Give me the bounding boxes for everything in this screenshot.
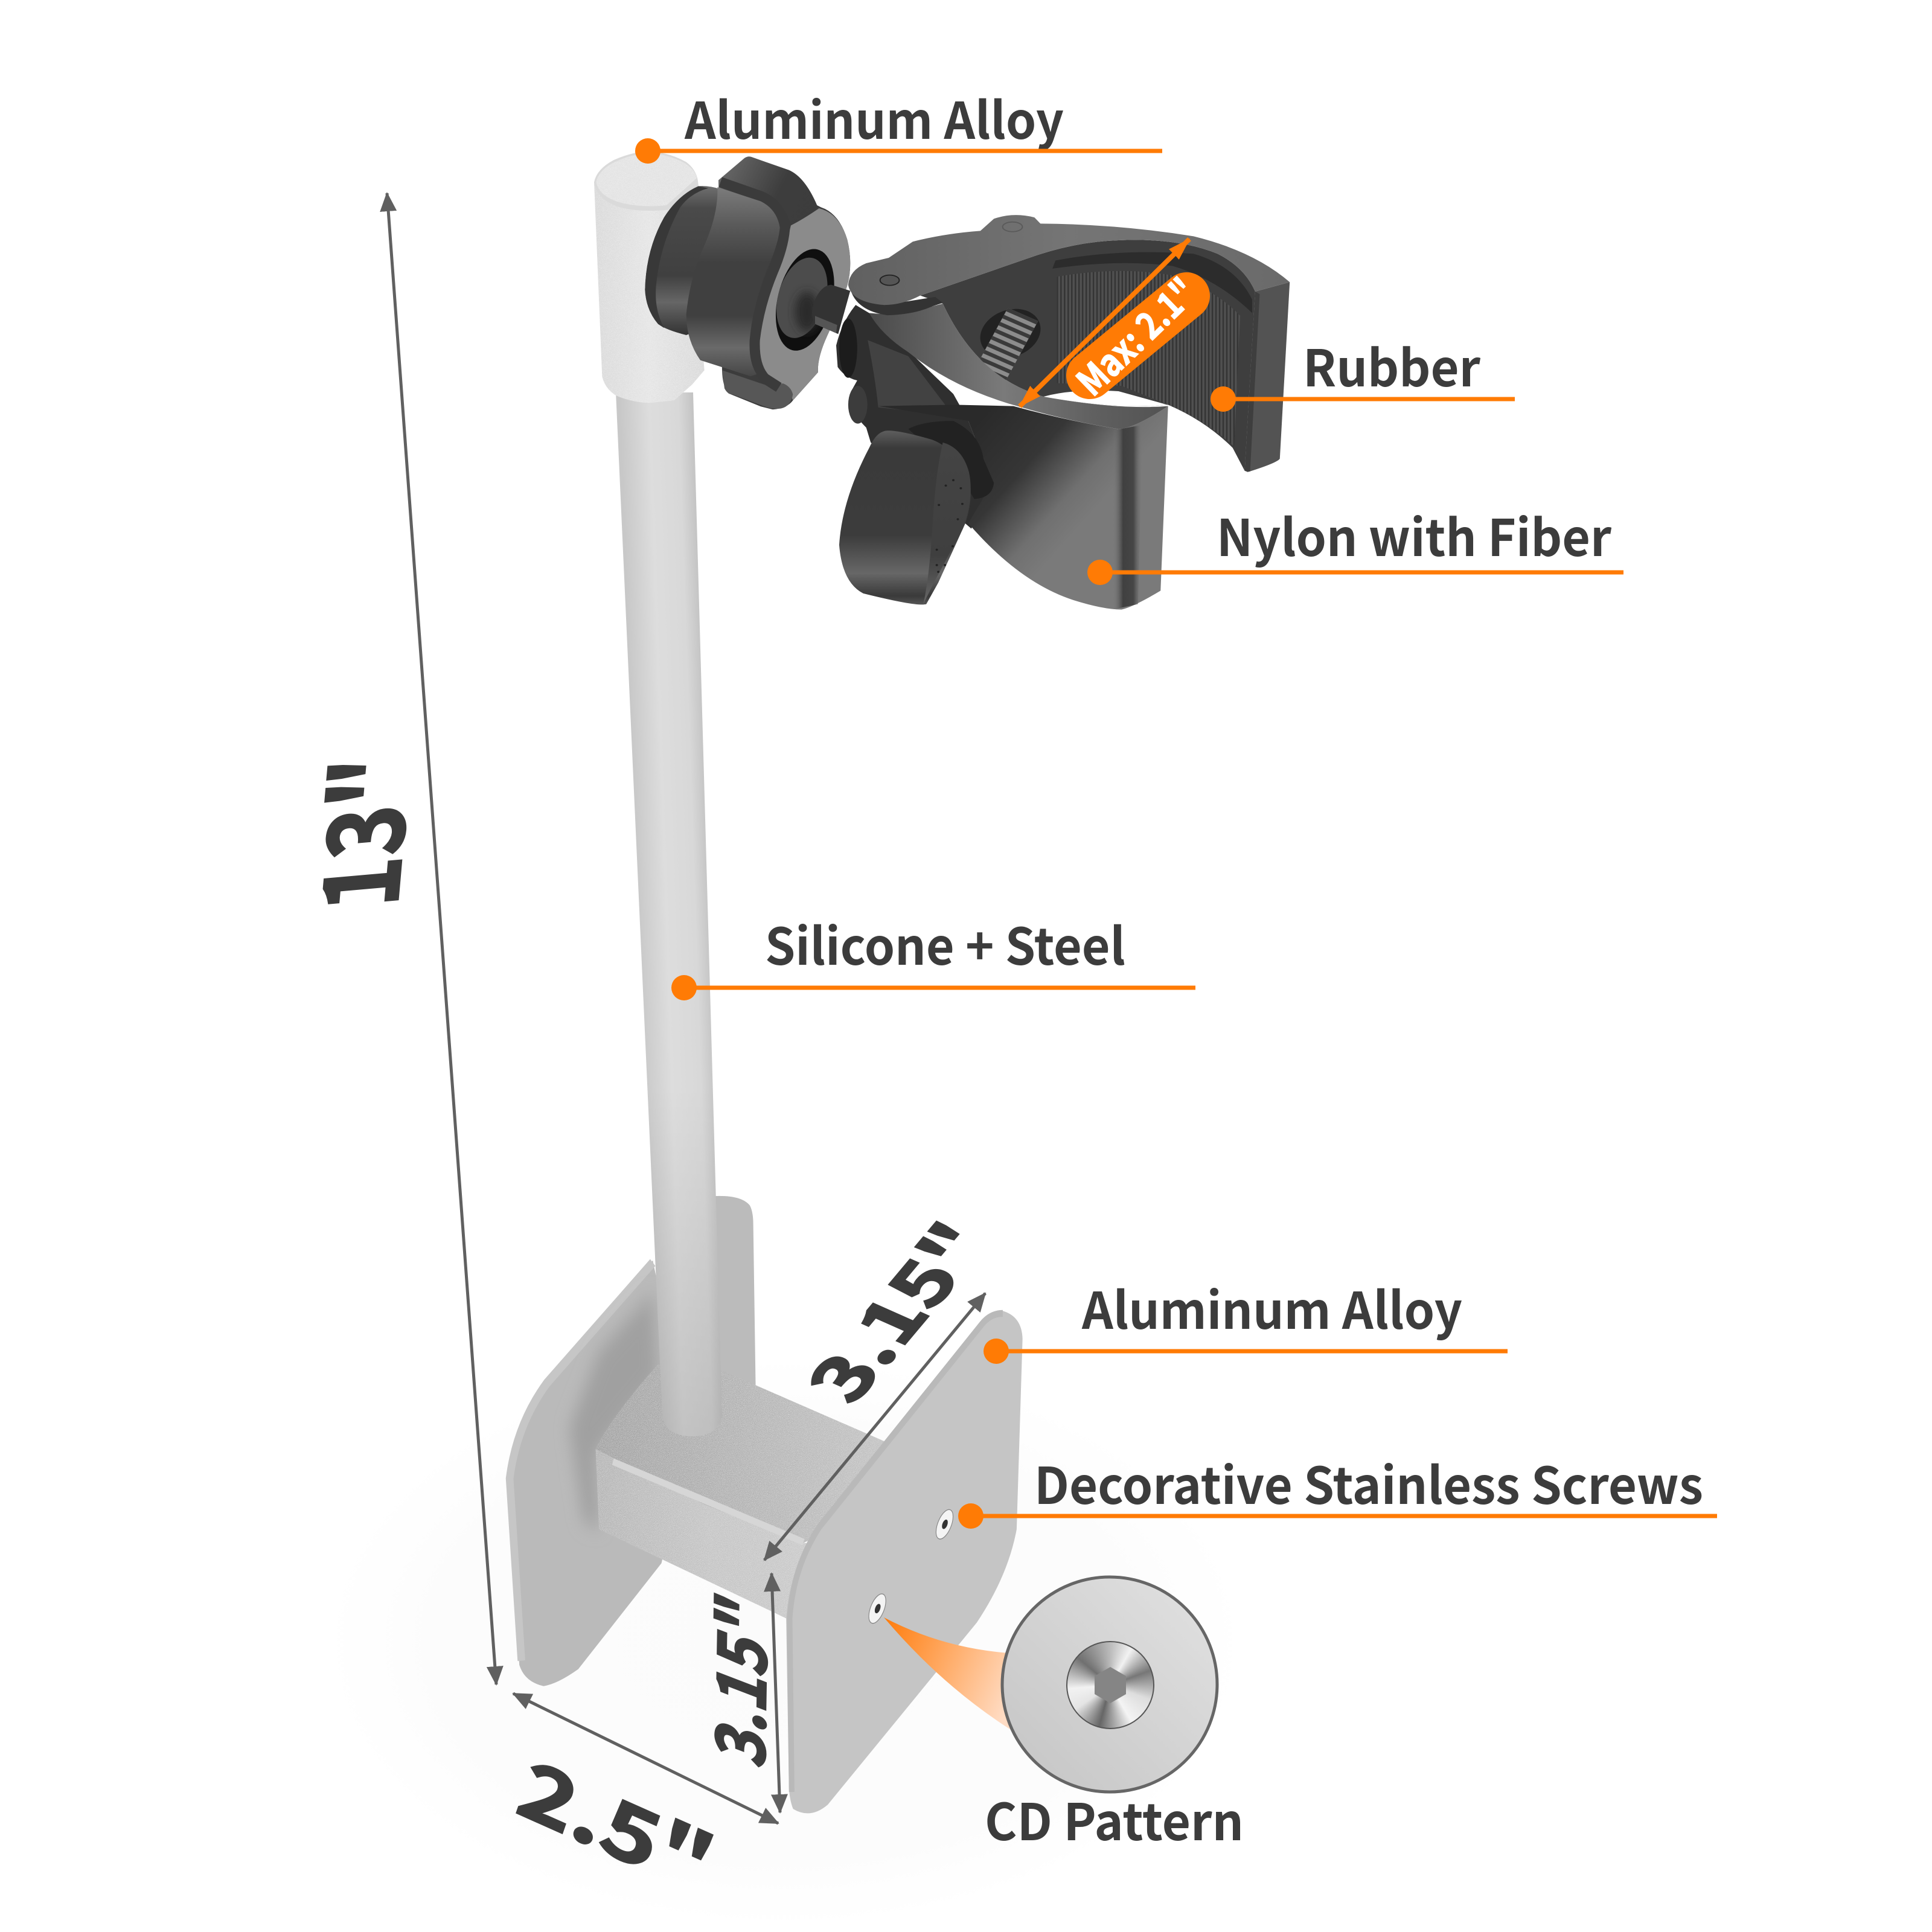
inner back wall xyxy=(920,240,1255,471)
label: base aluminum alloy xyxy=(984,1271,1508,1364)
dimension: 2.5 inch width xyxy=(506,1694,778,1916)
hub xyxy=(836,305,993,529)
label: rubber: Rubber xyxy=(1303,328,1480,401)
plate shadow xyxy=(569,1292,658,1529)
bar front face xyxy=(595,1449,824,1631)
rod: silicone and steel xyxy=(616,392,722,1436)
left plate bevel xyxy=(510,1262,653,1661)
bar top face xyxy=(595,1364,897,1550)
wing knob hub xyxy=(908,421,994,499)
base: aluminum plates and bar xyxy=(507,1196,897,1686)
hex socket xyxy=(1095,1667,1126,1703)
front jaw body xyxy=(878,405,1168,610)
cap top face xyxy=(596,153,697,206)
rear stud xyxy=(1003,222,1022,232)
ground shadow xyxy=(326,1358,1244,1926)
label: decorative stainless screws: Decorative Stainless Screws xyxy=(1034,1446,1703,1519)
cap top rim xyxy=(594,152,699,211)
label: CD pattern: CD Pattern xyxy=(985,1782,1244,1855)
knob outer face xyxy=(759,208,850,400)
knob xyxy=(645,156,850,409)
screw lower xyxy=(865,1591,889,1627)
max opening pill xyxy=(1090,296,1186,376)
socket xyxy=(766,243,844,357)
collar outer band xyxy=(645,186,708,328)
upper plate lip xyxy=(849,286,943,315)
max opening label: Max: 2.1" xyxy=(1063,264,1207,406)
detail circle: CD pattern screw xyxy=(1002,1577,1217,1792)
jaw corner band xyxy=(1113,425,1142,610)
screw hole xyxy=(970,299,1051,367)
pivot pin xyxy=(880,275,899,286)
screw upper xyxy=(933,1506,956,1543)
screw head with CD finish xyxy=(1066,1641,1154,1729)
bar edge highlight xyxy=(613,1462,804,1542)
ball xyxy=(768,252,836,344)
right jaw inner edge xyxy=(1245,292,1259,472)
left plate xyxy=(507,1261,675,1686)
label: silicone and steel xyxy=(671,907,1195,1000)
threaded screw xyxy=(990,315,1023,376)
knob silhouette and lobes xyxy=(718,156,850,409)
right plate body xyxy=(786,1310,1023,1813)
wing knob dimples xyxy=(936,479,964,573)
wing knob face xyxy=(923,443,971,604)
dimension: 3.15 inch height: 3.15" xyxy=(687,1579,787,1778)
dimension: 3.15 inch depth xyxy=(764,1205,1012,1560)
upper pivot plate xyxy=(848,215,1290,305)
label: top aluminum alloy: Aluminum Alloy xyxy=(684,81,1064,154)
clamp xyxy=(836,215,1290,610)
hub disc xyxy=(839,318,857,378)
right plate bevel xyxy=(790,1313,1003,1792)
stem xyxy=(812,285,850,334)
rear tab of left plate xyxy=(689,1196,756,1390)
max opening arrow xyxy=(1020,239,1189,406)
stem highlight xyxy=(815,316,837,333)
hub stud xyxy=(848,386,868,424)
dimension: 3.15 inch depth: 3.15" xyxy=(776,1205,1012,1416)
label: top aluminum alloy xyxy=(635,81,1162,164)
aluminum top cap xyxy=(594,152,705,403)
dimension: 13 inch height xyxy=(275,193,496,1684)
knob back collar xyxy=(645,186,724,335)
right jaw end xyxy=(1245,282,1290,472)
right plate and screws xyxy=(786,1310,1023,1813)
knob raised ridge xyxy=(720,182,785,388)
label: base aluminum alloy: Aluminum Alloy xyxy=(1081,1271,1462,1344)
inner shade under rim xyxy=(1052,252,1252,313)
label: silicone and steel: Silicone + Steel xyxy=(765,907,1125,980)
knob front body xyxy=(686,187,780,376)
hub block xyxy=(868,340,953,415)
dimension: 2.5 inch width: 2.5" xyxy=(506,1729,729,1916)
orange callout cone xyxy=(884,1617,1012,1730)
label: rubber xyxy=(1211,328,1515,412)
ball shade xyxy=(795,292,819,332)
label: nylon with fiber xyxy=(1087,498,1623,585)
dimension: 13 inch height: 13" xyxy=(275,749,441,918)
knob lower tab xyxy=(722,370,793,409)
jaw top strip xyxy=(869,304,1168,429)
rubber ribs xyxy=(1057,271,1240,447)
opening xyxy=(1043,391,1167,406)
cap body xyxy=(594,182,705,403)
wing knob xyxy=(839,430,971,604)
label: nylon with fiber: Nylon with Fiber xyxy=(1217,498,1611,571)
